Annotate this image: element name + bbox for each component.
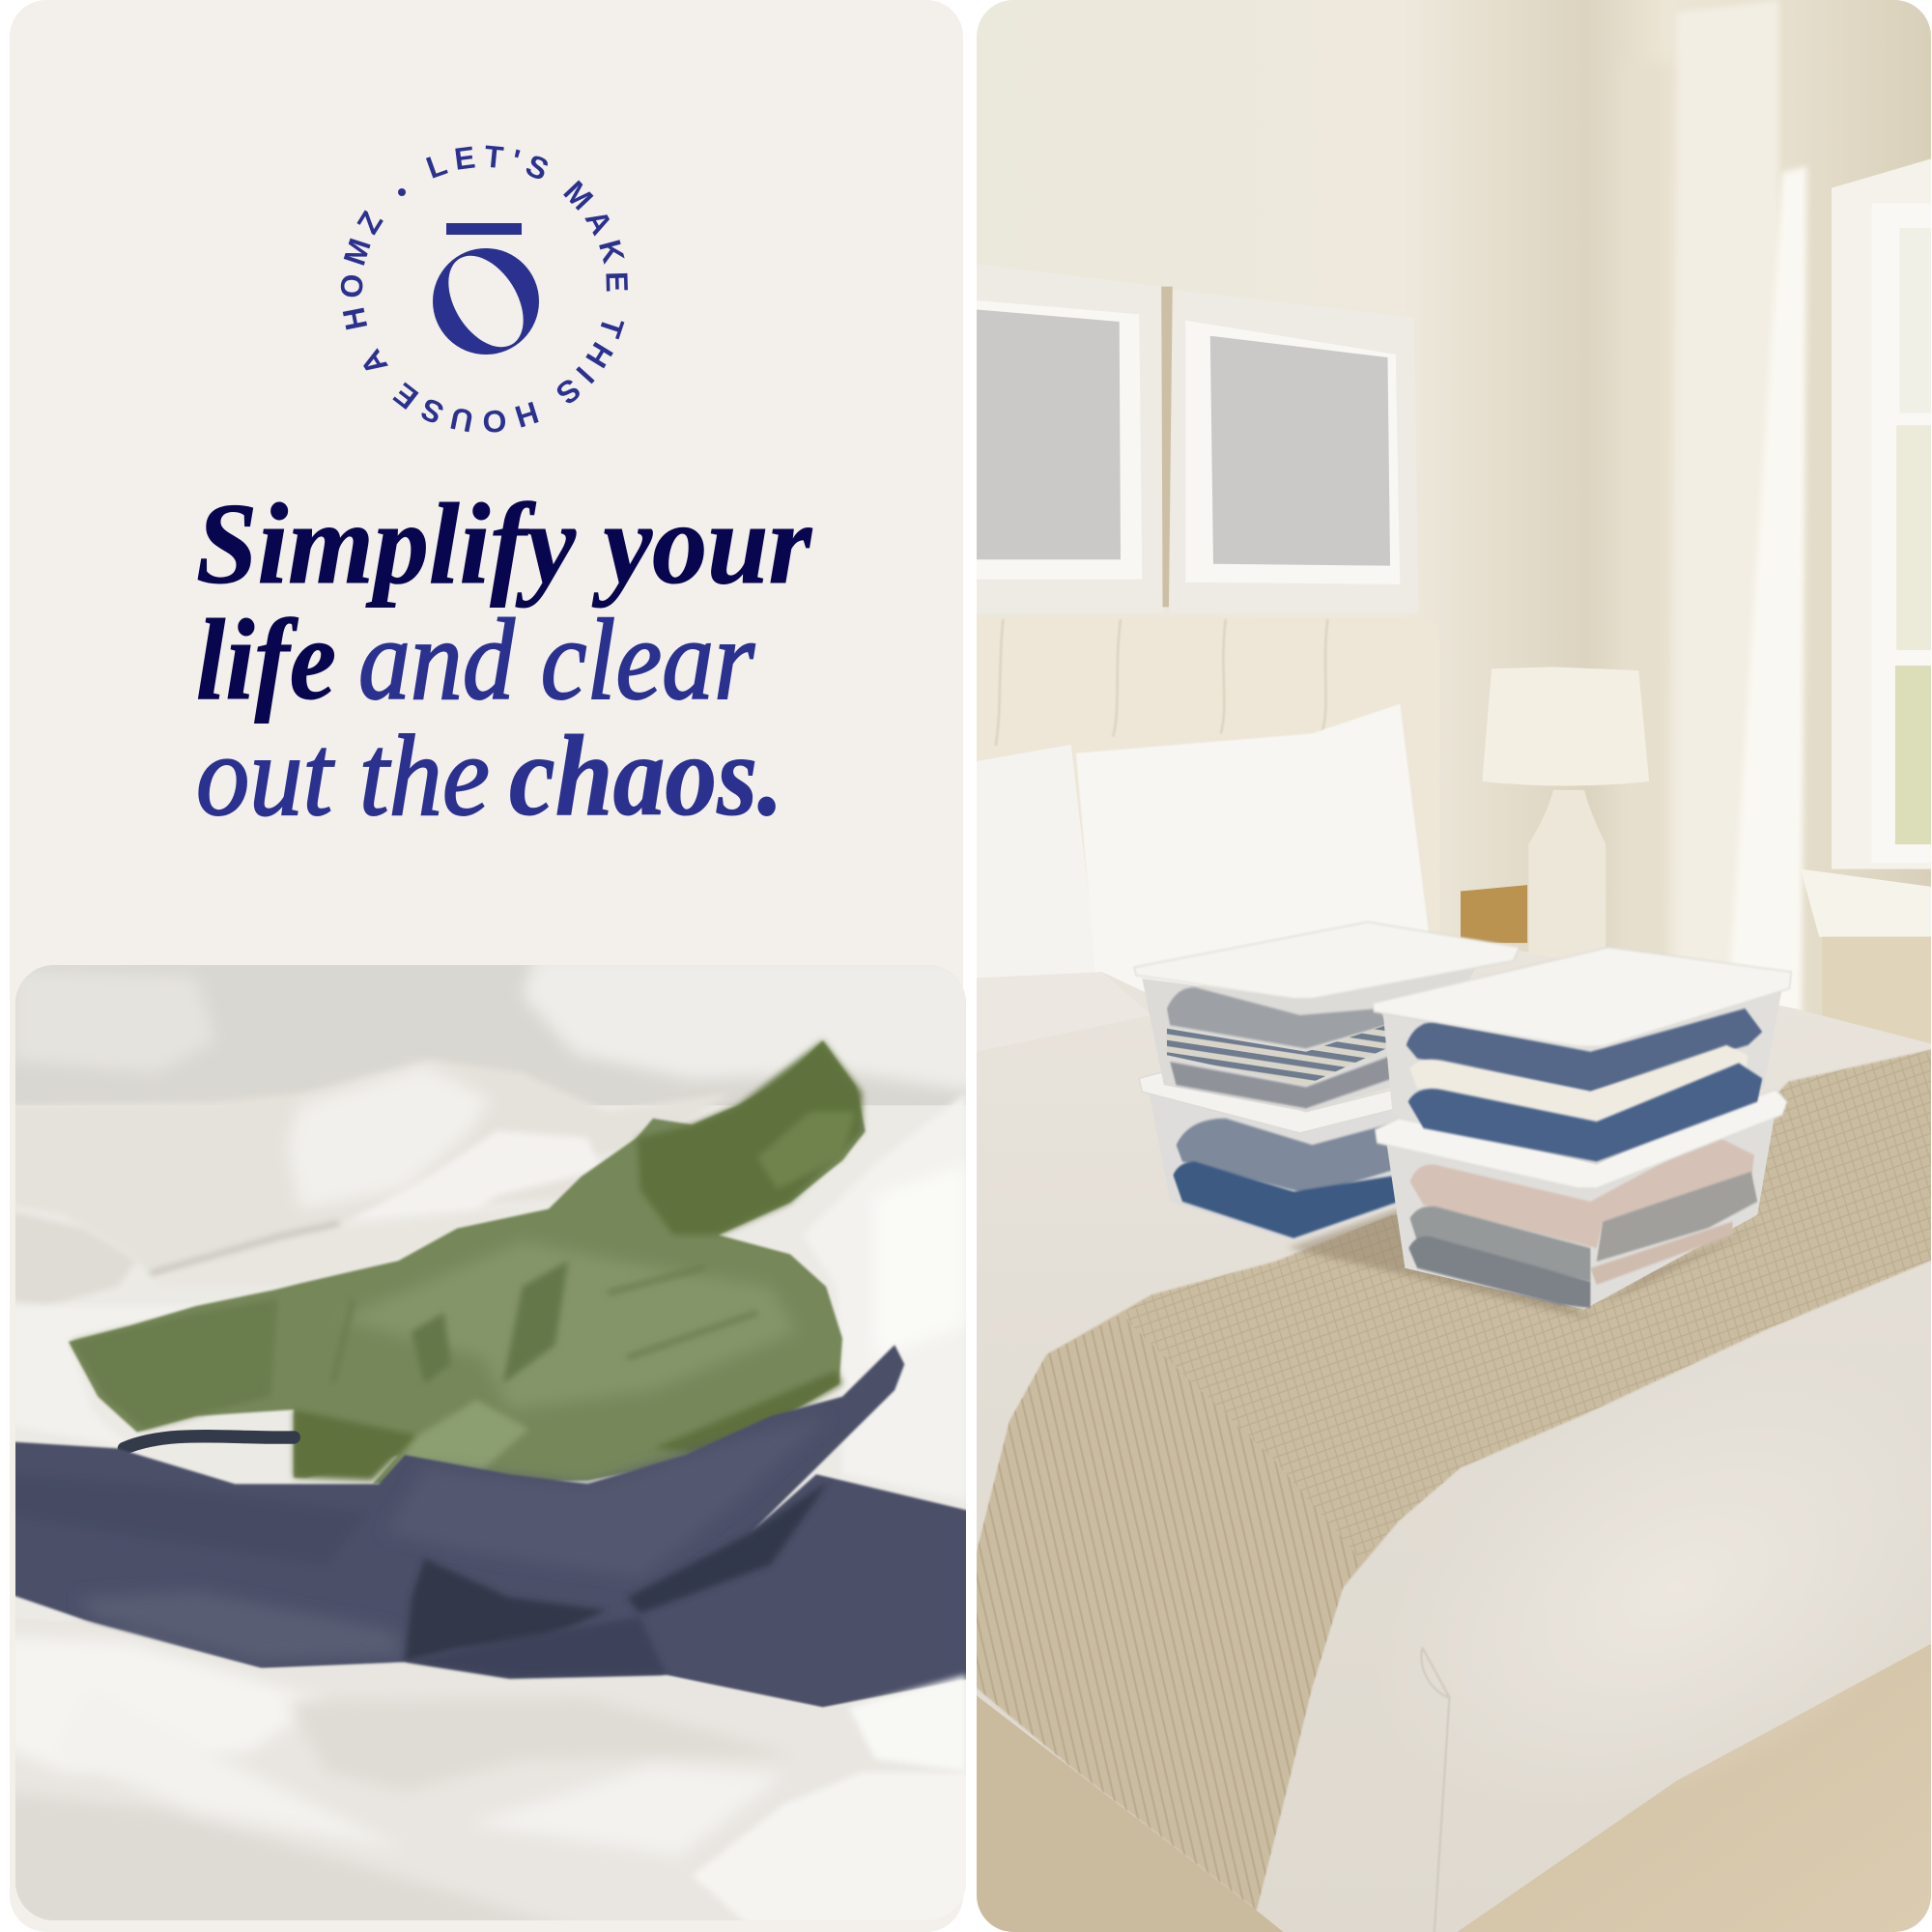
logo: round Homz badge <box>340 145 628 433</box>
box: back upper <box>1134 922 1520 1112</box>
panel: left cream card <box>10 0 963 1932</box>
white duvet folds lower <box>15 1625 966 1920</box>
heading: simplify your life and clear out the chaos: chaos. <box>509 711 783 839</box>
heading: simplify your life and clear out the chaos <box>196 479 812 839</box>
bed base <box>977 1644 1931 1932</box>
box: front upper <box>1373 948 1791 1165</box>
wall outlet <box>1461 885 1527 943</box>
green t-shirt <box>69 1040 866 1484</box>
logo circular tagline: LET'S MAKE THIS HOUSE A HOMZ <box>340 145 628 433</box>
heading: simplify your life and clear out the chaos: Simplify your <box>196 479 812 608</box>
logo separator dot <box>398 188 406 196</box>
duvet <box>966 935 1932 1932</box>
box: front lower <box>1376 1090 1787 1309</box>
wall art frame right <box>1185 317 1418 612</box>
bedroom wall, frames, headboard, lamp <box>977 0 1931 1043</box>
heading: simplify your life and clear out the chaos: out the <box>196 711 490 839</box>
wall art frame left <box>977 286 1173 607</box>
bed, throw and boxes <box>966 922 1932 1932</box>
curtain <box>1673 0 1779 962</box>
logo macron bar <box>446 223 522 235</box>
headboard <box>994 618 1329 747</box>
heading: simplify your life and clear out the chaos: life <box>196 595 336 724</box>
heading: simplify your life and clear out the chaos: and clear <box>358 595 755 724</box>
pillows <box>977 703 1429 992</box>
photo: messy bed with scattered clothes <box>0 951 993 1932</box>
duvet corner fold <box>1421 1647 1449 1932</box>
photo: tidy bedroom with storage boxes <box>960 0 1932 1932</box>
rumpled sheets upper <box>0 956 993 1500</box>
navy joggers <box>0 1345 993 1707</box>
table lamp <box>1482 667 1649 958</box>
window <box>1802 158 1931 1028</box>
box shadows <box>1288 1208 1764 1318</box>
logo letter o <box>433 242 539 360</box>
beige throw blanket <box>976 1048 1932 1911</box>
black belt strap <box>124 1436 294 1448</box>
box: back lower <box>1139 1071 1411 1241</box>
